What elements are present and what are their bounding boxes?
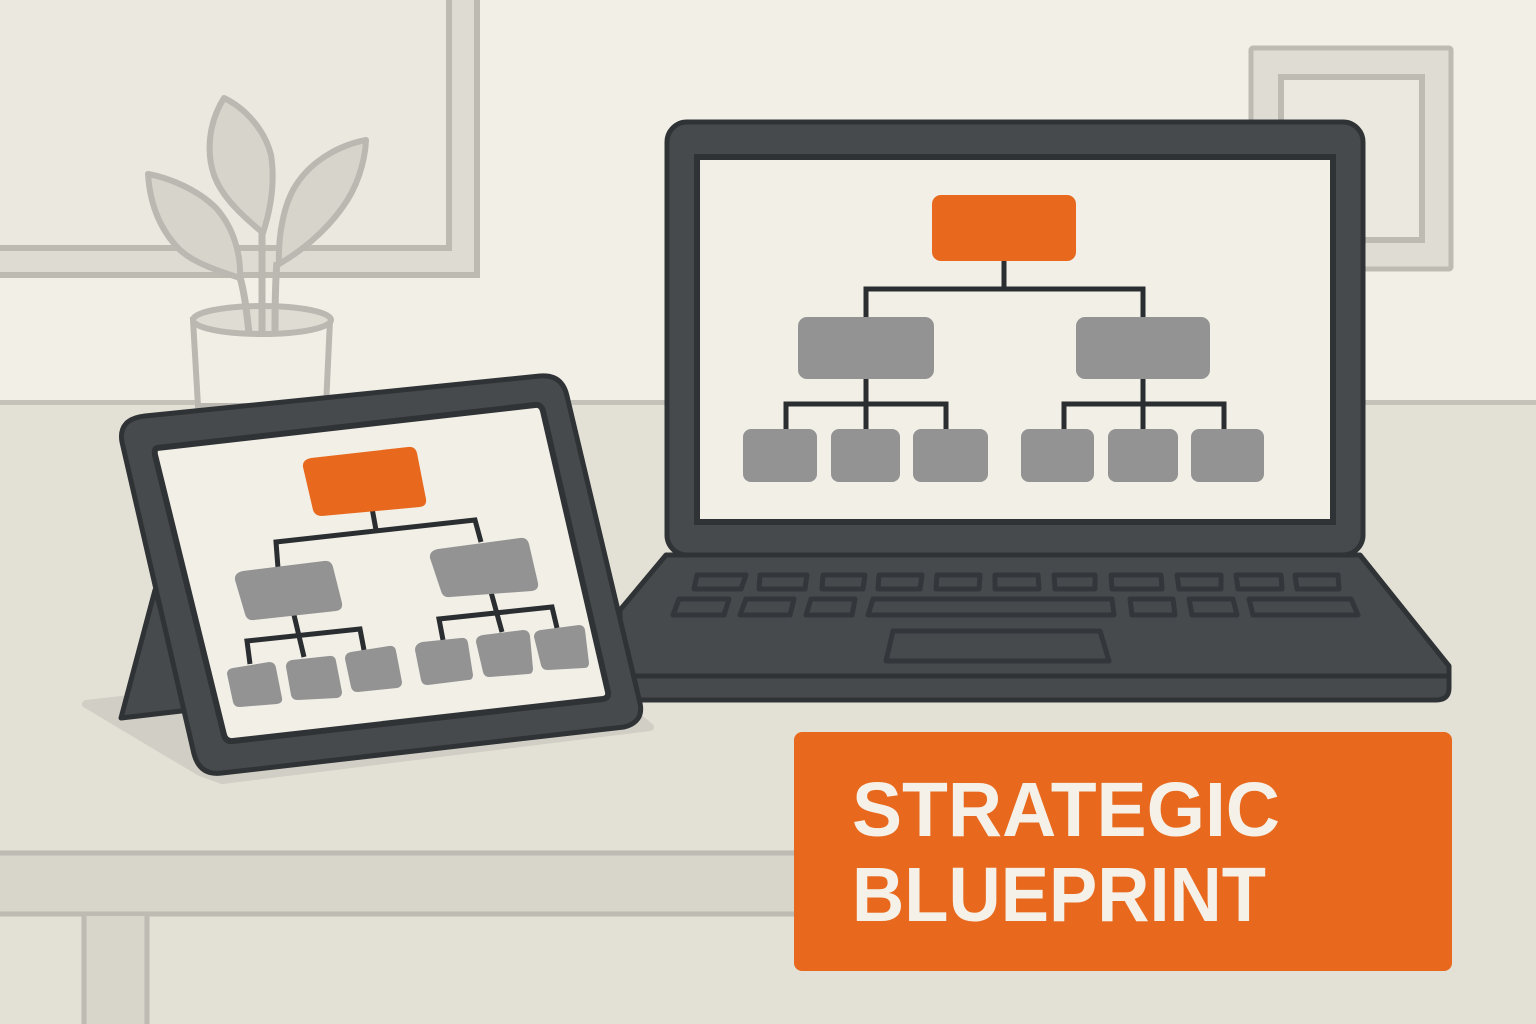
plant leaves <box>148 98 366 278</box>
wall picture frame right <box>1251 48 1451 269</box>
tablet screen <box>155 405 608 741</box>
tablet connectors <box>247 508 557 664</box>
laptop lid <box>667 122 1363 555</box>
laptop top box <box>932 195 1076 261</box>
laptop keyboard <box>673 575 1358 661</box>
tablet shadow <box>86 698 650 780</box>
plant <box>148 98 366 406</box>
title text: STRATEGIC <box>852 767 1280 853</box>
laptop middle boxes <box>798 317 1210 379</box>
laptop base <box>620 555 1449 700</box>
tablet bottom boxes <box>227 625 589 707</box>
title banner <box>794 732 1452 971</box>
table edge <box>0 853 800 914</box>
tablet top box <box>303 447 426 516</box>
plant pot <box>193 320 330 406</box>
title banner: BLUEPRINT <box>852 852 1266 938</box>
laptop <box>620 122 1449 700</box>
wall picture frame left <box>0 0 478 275</box>
tablet org chart <box>227 447 589 707</box>
laptop connectors <box>786 260 1224 430</box>
laptop org chart <box>743 195 1264 482</box>
tablet middle boxes <box>235 538 538 620</box>
desk surface <box>0 400 1536 1024</box>
wall background <box>0 0 1536 403</box>
table leg <box>84 916 147 1024</box>
tablet stand <box>121 590 190 718</box>
laptop bottom boxes <box>743 429 1264 482</box>
tablet body <box>121 376 641 773</box>
tablet <box>121 376 641 773</box>
plant stems <box>240 230 277 333</box>
